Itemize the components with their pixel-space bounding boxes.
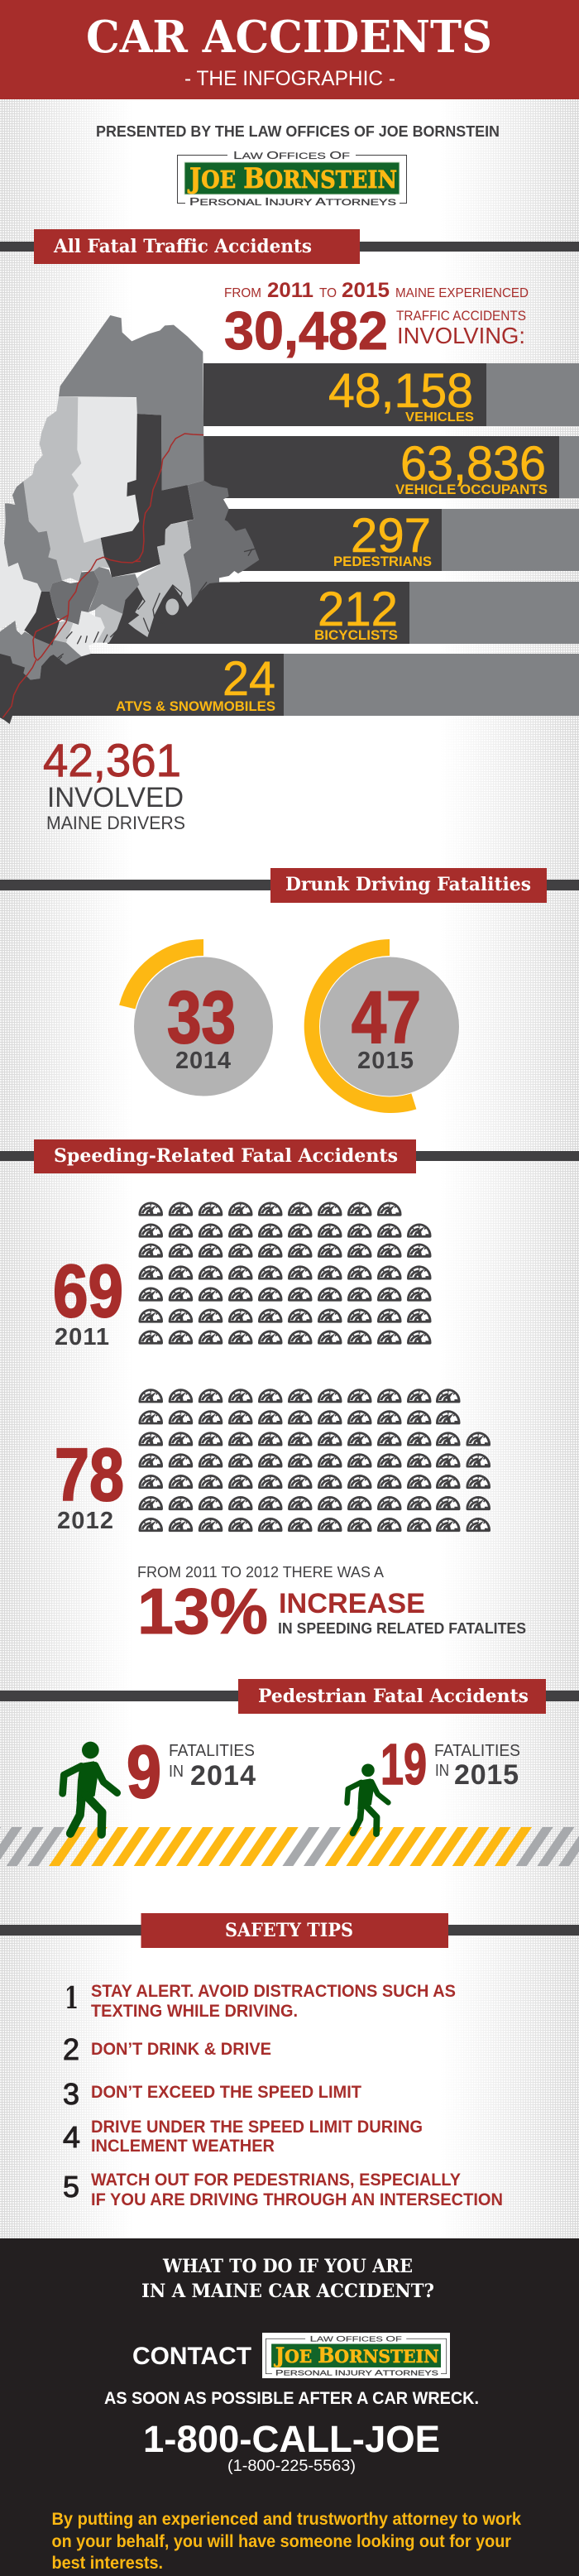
closing statement: best interests. — [51, 2554, 163, 2573]
section heading: pedestrian fatal accidents: Pedestrian Fatal Accidents — [258, 1686, 529, 1707]
county: Washington — [184, 481, 259, 602]
footer panel — [0, 2238, 579, 2576]
intro statement: TRAFFIC ACCIDENTS — [396, 309, 526, 324]
logo: footer Joe Bornstein: LAW O FFICES O F — [310, 2335, 402, 2343]
tip 3: 3 — [63, 2077, 79, 2111]
contact label: CONTACT — [132, 2343, 251, 2370]
stat: 19 fatalities in 2015: IN — [435, 1762, 449, 1780]
intro statement: TO — [319, 286, 337, 300]
stat: 78 in 2012: 2012 — [57, 1508, 113, 1534]
map south tip — [0, 714, 12, 724]
tip 4: INCLEMENT WEATHER — [91, 2137, 275, 2156]
stat: 9 fatalities in 2014 — [127, 1731, 256, 1814]
donut: 2014 drunk driving: 33 — [167, 976, 236, 1058]
logo: Joe Bornstein: P ERSONAL INJURY A TTORNEYS — [189, 195, 396, 208]
bar chart: involved parties — [0, 363, 579, 716]
tip 5 — [63, 2170, 503, 2209]
icon: pedestrian 2015 — [347, 1763, 388, 1834]
callout: 13% increase: IN SPEEDING RELATED FATALITES — [278, 1620, 526, 1637]
stat: involved Maine drivers: INVOLVED — [47, 782, 184, 813]
county: small western — [0, 631, 8, 654]
section heading: all fatal traffic accidents — [0, 229, 579, 264]
county: Sagadahoc — [54, 621, 73, 643]
callout: 13% increase: 13% — [137, 1575, 268, 1648]
logo: footer Joe Bornstein: P ERSONAL INJURY A TTORNEYS — [275, 2369, 438, 2377]
callout: 13% increase — [137, 1564, 526, 1648]
section heading: all fatal traffic accidents: All Fatal Traffic Accidents — [53, 236, 312, 257]
county: Piscataquis — [101, 414, 194, 578]
map of Maine — [0, 315, 259, 724]
callout: 13% increase: FROM 2011 TO 2012 THERE WAS A — [137, 1564, 384, 1581]
bar value: ATVs and snowmobiles — [116, 652, 275, 714]
tip 1: STAY ALERT. AVOID DISTRACTIONS SUCH AS — [91, 1982, 456, 2001]
crosswalk stripes — [0, 1827, 579, 1866]
section heading: safety tips: SAFETY TIPS — [225, 1920, 353, 1941]
tip 2: 2 — [63, 2032, 79, 2066]
county: Oxford — [4, 482, 62, 592]
coast white specks — [219, 571, 240, 582]
county: York — [0, 621, 66, 680]
intro statement: FROM — [224, 286, 261, 300]
intro statement: MAINE EXPERIENCED — [395, 286, 529, 300]
bar value: pedestrians: PEDESTRIANS — [333, 554, 432, 569]
tip 4: 4 — [63, 2120, 80, 2154]
county: Somerset — [72, 397, 139, 543]
county: Waldo — [89, 567, 139, 614]
stat: 9 fatalities in 2014: 2014 — [190, 1760, 256, 1792]
stat: 19 fatalities in 2015: 2015 — [454, 1759, 519, 1791]
county: Androscoggin — [24, 592, 60, 645]
pictogram: speedometers 2012 — [139, 1389, 490, 1532]
tip 3: DON’T EXCEED THE SPEED LIMIT — [91, 2083, 361, 2102]
donut: 2014 drunk driving: 2014 — [175, 1048, 231, 1074]
stat: 19 fatalities in 2015: 19 — [380, 1732, 427, 1796]
island: Mount Desert — [165, 598, 179, 615]
closing statement: on your behalf, you will have someone looking out for your — [51, 2532, 511, 2551]
title: CAR ACCIDENTS — [86, 11, 492, 63]
stat: involved Maine drivers: 42,361 — [43, 734, 181, 786]
phone digits: (1-800-225-5563) — [227, 2458, 356, 2475]
stat: 78 in 2012: 78 — [55, 1434, 124, 1517]
stat: 69 in 2011: 2011 — [55, 1324, 109, 1350]
tip 5: 5 — [63, 2170, 79, 2204]
logo: Joe Bornstein — [177, 149, 407, 208]
intro statement — [224, 279, 529, 361]
logo: footer Joe Bornstein — [262, 2333, 450, 2378]
stat: involved Maine drivers — [43, 734, 185, 833]
section heading: drunk driving fatalities: Drunk Driving Fatalities — [285, 874, 531, 895]
intro statement: INVOLVING: — [397, 323, 525, 348]
section heading: drunk driving fatalities — [0, 868, 579, 903]
stat: 19 fatalities in 2015 — [380, 1732, 520, 1796]
donut: 2015 drunk driving: 2015 — [357, 1048, 414, 1074]
county: Kennebec — [50, 571, 99, 625]
logo: Joe Bornstein: JOE BORNSTEIN — [187, 162, 397, 195]
county: Aroostook — [59, 315, 204, 491]
bar value: ATVs and snowmobiles: ATVS & SNOWMOBILES — [116, 698, 275, 714]
footer heading: IN A MAINE CAR ACCIDENT? — [141, 2281, 434, 2302]
icon: pedestrian 2014 — [63, 1742, 117, 1835]
tip 5: IF YOU ARE DRIVING THROUGH AN INTERSECTION — [91, 2190, 503, 2209]
donut: 2015 drunk driving: 47 — [352, 976, 421, 1058]
tip 1: 1 — [65, 1981, 79, 2016]
closing statement — [51, 2510, 521, 2573]
intro statement: 2015 — [342, 279, 390, 302]
county: western light — [0, 527, 41, 635]
bar value: vehicles: 48,158 — [328, 364, 473, 418]
intro statement: 30,482 — [224, 300, 388, 361]
bar value: vehicle occupants: 63,836 — [400, 437, 546, 491]
contact timing: AS SOON AS POSSIBLE AFTER A CAR WRECK. — [104, 2389, 479, 2408]
tip 1 — [65, 1981, 456, 2021]
stat: 19 fatalities in 2015: FATALITIES — [434, 1742, 520, 1760]
donut: 2015 drunk driving — [304, 939, 460, 1113]
callout: 13% increase: INCREASE — [279, 1588, 425, 1619]
phone number: 1-800-CALL-JOE — [143, 2418, 440, 2460]
section heading: safety tips — [0, 1913, 579, 1948]
bar value: vehicles: VEHICLES — [405, 410, 474, 425]
bar value: bicyclists: 212 — [318, 583, 398, 636]
county: Cumberland coast — [31, 640, 81, 680]
footer heading — [141, 2256, 434, 2302]
tip 1: TEXTING WHILE DRIVING. — [91, 2002, 298, 2021]
tip 4 — [63, 2118, 423, 2156]
tip 3 — [63, 2077, 361, 2111]
tip 5: WATCH OUT FOR PEDESTRIANS, ESPECIALLY — [91, 2171, 461, 2190]
county: Hancock — [128, 521, 192, 637]
stat: 9 fatalities in 2014: IN — [169, 1763, 184, 1781]
bar value: vehicle occupants: VEHICLE OCCUPANTS — [395, 482, 548, 497]
intro statement: 2011 — [267, 279, 313, 302]
closing statement: By putting an experienced and trustworthy attorney to work — [51, 2510, 521, 2529]
stat: 9 fatalities in 2014: FATALITIES — [169, 1742, 255, 1760]
stat: 69 in 2011: 69 — [53, 1250, 123, 1333]
section heading: pedestrian fatal accidents — [0, 1679, 579, 1714]
road: interstate 95 — [2, 434, 203, 717]
section heading: speeding-related fatal accidents — [0, 1139, 579, 1173]
county: Knox — [95, 604, 122, 643]
bar value: bicyclists: BICYCLISTS — [314, 627, 398, 643]
presented by line: PRESENTED BY THE LAW OFFICES OF JOE BORNSTEIN — [96, 123, 500, 140]
pictogram: speedometers 2011 — [139, 1202, 431, 1345]
logo: Joe Bornstein: L AW O FFICES O F — [233, 149, 350, 161]
bar value: ATVs and snowmobiles: 24 — [223, 652, 275, 706]
tip 4: DRIVE UNDER THE SPEED LIMIT DURING — [91, 2118, 423, 2137]
stat: involved Maine drivers: MAINE DRIVERS — [46, 813, 185, 833]
county: Lincoln — [66, 611, 105, 656]
stat: 9 fatalities in 2014: 9 — [127, 1731, 161, 1814]
header banner — [0, 0, 579, 99]
coast detail — [41, 549, 255, 670]
tip 2: DON’T DRINK & DRIVE — [91, 2040, 271, 2059]
county: Franklin — [23, 396, 110, 582]
logo: footer Joe Bornstein: JOE BORNSTEIN — [274, 2344, 439, 2368]
donut: 2014 drunk driving — [119, 939, 273, 1096]
footer heading: WHAT TO DO IF YOU ARE — [162, 2256, 413, 2277]
bar value: pedestrians: 297 — [351, 509, 431, 563]
subtitle: - THE INFOGRAPHIC - — [184, 67, 395, 90]
section heading: speeding-related fatal accidents: Speeding-Related Fatal Accidents — [54, 1145, 398, 1167]
tip 2 — [63, 2032, 271, 2066]
